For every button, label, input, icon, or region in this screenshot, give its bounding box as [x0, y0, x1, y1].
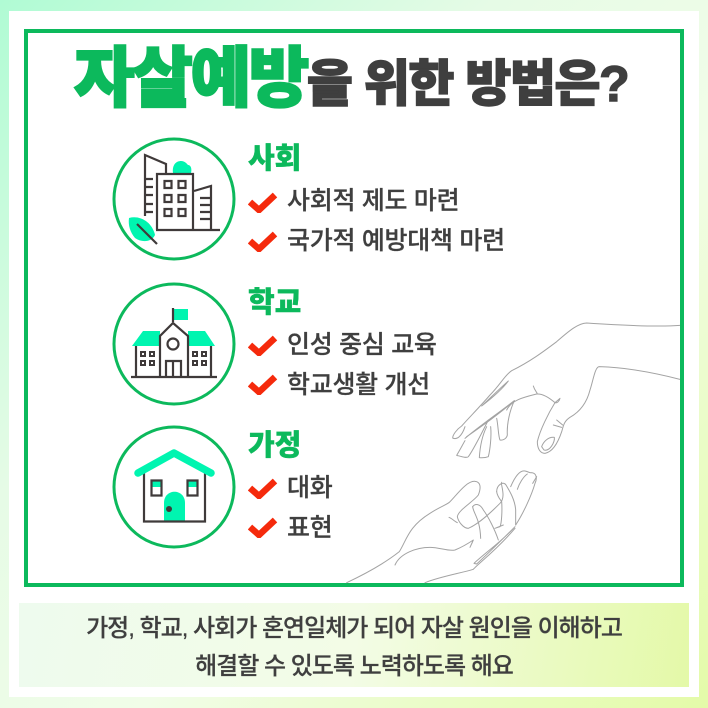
title: 자살예방을 위한 방법은?: [74, 41, 628, 115]
item text: 표현: [287, 514, 332, 542]
check icon: [248, 478, 278, 499]
line art: reaching hands: [346, 322, 680, 584]
green frame panel: [24, 29, 684, 587]
icon: city buildings: [112, 138, 236, 260]
check icon: [248, 336, 278, 356]
check icon: [248, 232, 278, 252]
bottom message panel: [19, 603, 689, 687]
heading: society: 사회: [248, 143, 301, 175]
icon: house: [112, 426, 236, 548]
item text: 국가적 예방대책 마련: [287, 227, 505, 255]
bottom message panel: 해결할 수 있도록 노력하도록 해요: [195, 653, 513, 680]
icon: school: [112, 282, 236, 406]
heading: family: 가정: [248, 430, 301, 462]
item text: 학교생활 개선: [287, 371, 430, 399]
item text: 사회적 제도 마련: [287, 187, 459, 215]
check icon: [248, 518, 278, 538]
heading: school: 학교: [248, 287, 301, 319]
bottom message panel: 가정, 학교, 사회가 혼연일체가 되어 자살 원인을 이해하고: [86, 615, 622, 642]
item text: 대화: [287, 474, 332, 502]
check icon: [248, 192, 278, 213]
check icon: [248, 374, 278, 395]
item text: 인성 중심 교육: [287, 331, 437, 359]
